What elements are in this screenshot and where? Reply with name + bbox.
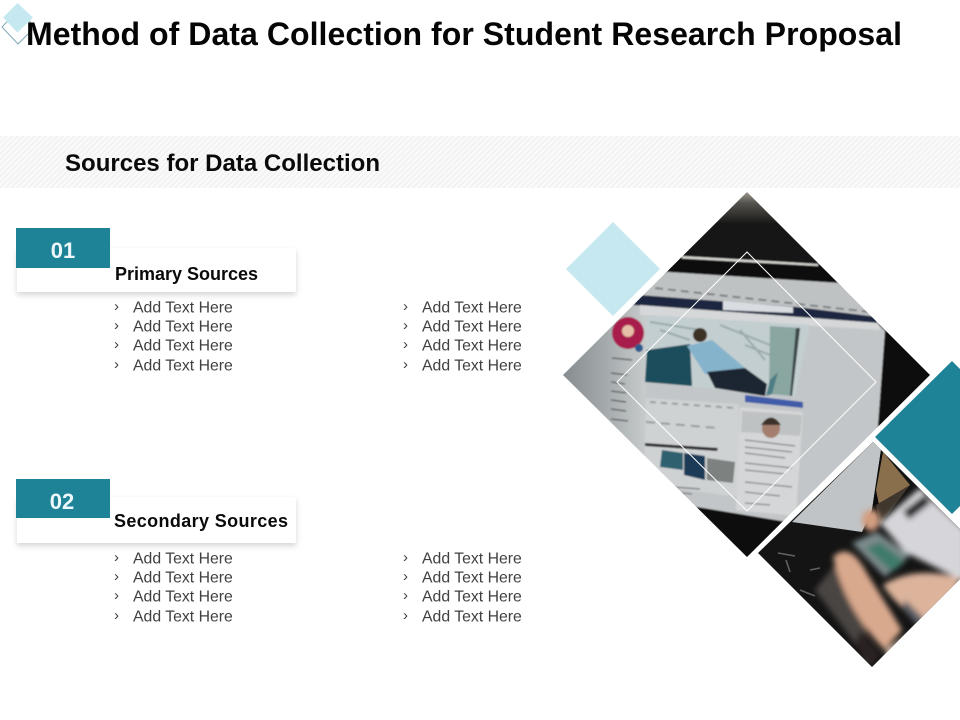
sofa bbox=[645, 344, 692, 386]
heading: primary sources: Primary Sources bbox=[115, 264, 258, 284]
list: secondary column one: Add Text Here bbox=[133, 588, 233, 605]
list: primary column one: Add Text Here bbox=[133, 318, 233, 335]
man bbox=[687, 340, 745, 378]
bezel bbox=[668, 258, 886, 334]
list: secondary column two: Add Text Here bbox=[422, 588, 522, 605]
photo: hand with phone diamond bbox=[750, 440, 960, 670]
list: primary column two: Add Text Here bbox=[422, 318, 522, 335]
screen bbox=[634, 270, 886, 522]
list: primary column one: Add Text Here bbox=[133, 299, 233, 316]
avatar bbox=[612, 317, 644, 349]
list: secondary column two: Add Text Here bbox=[422, 608, 522, 625]
list: primary column one: › bbox=[114, 317, 119, 334]
list: primary column two bbox=[403, 298, 522, 374]
number badge 02: 02 bbox=[50, 489, 74, 514]
list: secondary column one: Add Text Here bbox=[133, 550, 233, 567]
icon: light blue diamond bbox=[566, 222, 660, 316]
list: primary column two: Add Text Here bbox=[422, 299, 522, 316]
list: primary column one: › bbox=[114, 298, 119, 315]
list: secondary column two: › bbox=[403, 549, 408, 566]
list: primary column two: › bbox=[403, 317, 408, 334]
outline diamond bbox=[617, 252, 876, 511]
subtitle: Sources for Data Collection bbox=[65, 150, 380, 177]
list: secondary column one: › bbox=[114, 549, 119, 566]
navy nav bar bbox=[633, 295, 878, 323]
subtitle band bbox=[0, 136, 960, 188]
list: secondary column two bbox=[403, 549, 522, 625]
list: primary column one: Add Text Here bbox=[133, 357, 233, 374]
number badge 01: 01 bbox=[51, 238, 75, 263]
list: primary column two: Add Text Here bbox=[422, 357, 522, 374]
list: secondary column one: Add Text Here bbox=[133, 608, 233, 625]
list: primary column one bbox=[114, 298, 233, 374]
sidebar bbox=[563, 308, 631, 442]
feed cards bbox=[644, 398, 739, 497]
list: primary column two: › bbox=[403, 336, 408, 353]
panel: primary sources bbox=[16, 228, 522, 374]
list: primary column one: › bbox=[114, 356, 119, 373]
number badge 01 bbox=[16, 228, 110, 268]
cover photo bbox=[648, 320, 802, 394]
title: Method of Data Collection for Student Research Proposal bbox=[26, 16, 902, 52]
list: primary column two: › bbox=[403, 298, 408, 315]
list: secondary column one: › bbox=[114, 568, 119, 585]
photo: laptop screen diamond bbox=[563, 192, 930, 557]
list: secondary column one: Add Text Here bbox=[133, 569, 233, 586]
icon: teal diamond bbox=[875, 361, 960, 514]
keyboard base bbox=[698, 508, 782, 550]
list: secondary column two: › bbox=[403, 568, 408, 585]
text lines bbox=[745, 440, 795, 505]
person thumbnail bbox=[741, 411, 802, 436]
list: secondary column two: Add Text Here bbox=[422, 569, 522, 586]
post images bbox=[660, 450, 683, 470]
list: secondary column two: › bbox=[403, 607, 408, 624]
panel: secondary sources bbox=[16, 479, 522, 625]
icon: title diamonds bbox=[2, 3, 35, 44]
list: primary column one: › bbox=[114, 336, 119, 353]
list: secondary column two: › bbox=[403, 587, 408, 604]
list: primary column two: Add Text Here bbox=[422, 337, 522, 354]
browser bar bbox=[640, 272, 878, 317]
number badge 02 bbox=[16, 479, 110, 518]
list: secondary column one bbox=[114, 549, 233, 625]
list: primary column two: › bbox=[403, 356, 408, 373]
keyboard keys bbox=[778, 553, 820, 596]
list: secondary column one: › bbox=[114, 607, 119, 624]
list: secondary column one: › bbox=[114, 587, 119, 604]
sidebar labels bbox=[611, 358, 632, 421]
blue button bbox=[745, 395, 803, 408]
heading: secondary sources: Secondary Sources bbox=[114, 511, 288, 531]
list: secondary column two: Add Text Here bbox=[422, 550, 522, 567]
list: primary column one: Add Text Here bbox=[133, 337, 233, 354]
